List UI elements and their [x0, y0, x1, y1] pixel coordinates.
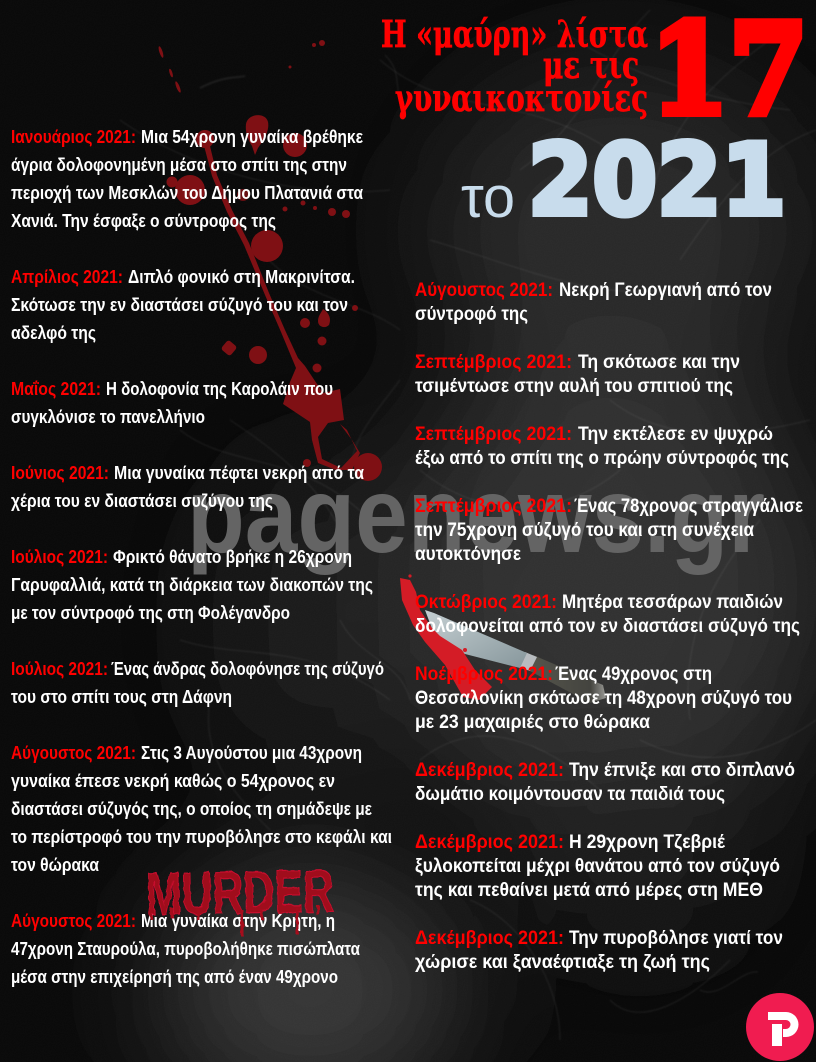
entry: Αύγουστος 2021, περίστροφο: γυναίκα έπεσε νεκρή καθώς ο 54χρονος εν: [11, 771, 335, 791]
entry: Δεκέμβριος 2021, Τζεβριέ: ξυλοκοπείται μέχρι θανάτου από τον σύζυγό: [415, 855, 780, 877]
entry: Σεπτέμβριος 2021, εκτέλεση: [415, 423, 789, 469]
entry: Σεπτέμβριος 2021, 78χρονος: Σεπτέμβριος 2021:: [415, 495, 572, 517]
icon: MURDER lettering: MURDER: [145, 857, 335, 928]
entry: Απρίλιος 2021: Σκότωσε την εν διαστάσει σύζυγό του και τον: [11, 295, 348, 316]
entry: Αύγουστος 2021, Γεωργιανή: σύντροφό της: [415, 303, 528, 325]
entry: Σεπτέμβριος 2021, αυλή: Σεπτέμβριος 2021:: [415, 351, 572, 373]
title: Η «μαύρη» λίστα με τις γυναικοκτονίες: με τις: [543, 43, 639, 87]
entry: Δεκέμβριος 2021, έπνιξε: Την έπνιξε και στο διπλανό: [569, 759, 795, 781]
entry: Αύγουστος 2021, Κρήτη: 47χρονη Σταυρούλα, πυροβολήθηκε πισώπλατα: [11, 939, 360, 959]
entry: Σεπτέμβριος 2021, αυλή: Τη σκότωσε και την: [578, 351, 740, 373]
entry: Μαΐος 2021: Η δολοφονία της Καρολάιν που: [106, 379, 333, 399]
entry: Αύγουστος 2021, περίστροφο: Αύγουστος 2021:: [11, 743, 136, 763]
entry: Ιούνιος 2021: Ιούνιος 2021:: [11, 463, 109, 483]
entry: Δεκέμβριος 2021, πυροβόλησε: χώρισε και ξαναέφτιαξε τη ζωή της: [415, 951, 710, 973]
entry: Σεπτέμβριος 2021, 78χρονος: την 75χρονη σύζυγό του και στη συνέχεια: [415, 519, 754, 541]
icon: MURDER lettering: [145, 857, 335, 936]
entry: Αύγουστος 2021, περίστροφο: τον θώρακα: [11, 855, 99, 875]
panel: left column: [11, 127, 392, 987]
logo: Pagenews P: [746, 993, 814, 1061]
entry: Οκτώβριος 2021: [415, 591, 800, 637]
title: Η «μαύρη» λίστα με τις γυναικοκτονίες: γυναικοκτονίες: [395, 76, 648, 120]
entry: Σεπτέμβριος 2021, εκτέλεση: Σεπτέμβριος 2021:: [415, 423, 572, 445]
entry: Ιανουάριος 2021: περιοχή των Μεσκλών του Δήμου Πλατανιά στα: [11, 183, 363, 203]
entry: Ιούλιος 2021, Δάφνη: Ένας άνδρας δολοφόνησε της σύζυγό: [111, 659, 384, 680]
entry: Οκτώβριος 2021: Μητέρα τεσσάρων παιδιών: [562, 591, 783, 613]
entry: Σεπτέμβριος 2021, εκτέλεση: Την εκτέλεσε εν ψυχρώ: [578, 423, 773, 445]
entry: Νοέμβριος 2021: Ένας 49χρονος στη: [555, 663, 712, 685]
entry: Αύγουστος 2021, περίστροφο: το περίστροφό του την πυροβόλησε στο κεφάλι και: [11, 827, 392, 847]
entry: Ιούλιος 2021, Δάφνη: [11, 659, 384, 707]
entry: Ιανουάριος 2021: Χανιά. Την έσφαξε ο σύντροφος της: [11, 211, 276, 232]
entry: Απρίλιος 2021: αδελφό της: [11, 323, 96, 343]
icon: bloody knife: [400, 574, 606, 703]
entry: Σεπτέμβριος 2021, αυλή: [415, 351, 740, 397]
entry: Αύγουστος 2021, Γεωργιανή: Νεκρή Γεωργιανή από τον: [559, 279, 772, 301]
entry: Αύγουστος 2021, Κρήτη: Αύγουστος 2021:: [11, 911, 136, 931]
entry: Δεκέμβριος 2021, πυροβόλησε: Δεκέμβριος 2021:: [415, 927, 564, 949]
entry: Αύγουστος 2021, περίστροφο: Στις 3 Αυγούστου μια 43χρονη: [141, 743, 362, 763]
entry: Αύγουστος 2021, Κρήτη: μέσα στην επιχείρησή της από έναν 49χρονο: [11, 967, 338, 987]
entry: Αύγουστος 2021, Γεωργιανή: Αύγουστος 2021:: [415, 279, 553, 301]
entry: Δεκέμβριος 2021, Τζεβριέ: [415, 831, 780, 901]
entry: Δεκέμβριος 2021, έπνιξε: δωμάτιο κοιμόντουσαν τα παιδιά τους: [415, 783, 725, 805]
year heading: το 2021: 2021: [528, 124, 786, 238]
entry: Ιούλιος 2021, Φολέγανδρος: Γαρυφαλλιά, κατά τη διάρκεια των διακοπών της: [11, 575, 373, 595]
title: Η «μαύρη» λίστα με τις γυναικοκτονίες: [381, 12, 648, 120]
entry: Απρίλιος 2021: [11, 267, 355, 343]
entry: Αύγουστος 2021, Γεωργιανή: [415, 279, 772, 325]
entry: Σεπτέμβριος 2021, 78χρονος: αυτοκτόνησε: [415, 543, 521, 565]
entry: Αύγουστος 2021, περίστροφο: διαστάσει σύζυγός της, ο οποίος τη σημάδεψε με: [11, 799, 372, 820]
entry: Δεκέμβριος 2021, πυροβόλησε: Την πυροβόλησε γιατί τον: [569, 927, 783, 949]
entry: Ιούνιος 2021: [11, 463, 364, 512]
entry: Απρίλιος 2021: Απρίλιος 2021:: [11, 267, 123, 287]
panel: right column: [415, 279, 803, 973]
entry: Αύγουστος 2021, Κρήτη: Μια γυναίκα στην Κρήτη, η: [141, 911, 335, 931]
entry: Δεκέμβριος 2021, έπνιξε: Δεκέμβριος 2021:: [415, 759, 564, 781]
entry: Ιούλιος 2021, Φολέγανδρος: Ιούλιος 2021:: [11, 547, 108, 567]
entry: Ιούλιος 2021, Φολέγανδρος: [11, 547, 373, 623]
entry: Σεπτέμβριος 2021, αυλή: τσιμέντωσε στην αυλή του σπιτιού της: [415, 375, 733, 397]
entry: Νοέμβριος 2021: [415, 663, 792, 733]
entry: Ιανουάριος 2021: [11, 127, 363, 232]
entry: Ιούνιος 2021: χέρια του εν διαστάσει συζύγου της: [11, 491, 273, 512]
entry: Μαΐος 2021: Μαΐος 2021:: [11, 379, 101, 399]
entry: Ιούλιος 2021, Δάφνη: του στο σπίτι τους στη Δάφνη: [11, 687, 232, 707]
entry: Σεπτέμβριος 2021, 78χρονος: [415, 495, 803, 565]
entry: Νοέμβριος 2021: με 23 μαχαιριές στο θώρακα: [415, 711, 650, 733]
entry: Αύγουστος 2021, Κρήτη: [11, 911, 360, 987]
entry: Ιούνιος 2021: Μια γυναίκα πέφτει νεκρή από τα: [114, 463, 364, 483]
blood splatter: [158, 40, 382, 481]
entry: Οκτώβριος 2021: Οκτώβριος 2021:: [415, 591, 557, 613]
entry: Νοέμβριος 2021: Νοέμβριος 2021:: [415, 663, 553, 685]
entry: Δεκέμβριος 2021, έπνιξε: [415, 759, 795, 805]
entry: Ιούλιος 2021, Φολέγανδρος: Φρικτό θάνατο βρήκε η 26χρονη: [113, 547, 352, 567]
entry: Δεκέμβριος 2021, πυροβόλησε: [415, 927, 783, 973]
entry: Μαΐος 2021: συγκλόνισε το πανελλήνιο: [11, 407, 205, 427]
entry: Δεκέμβριος 2021, Τζεβριέ: Η 29χρονη Τζεβριέ: [569, 831, 725, 853]
entry: Αύγουστος 2021, περίστροφο: [11, 743, 392, 875]
entry: Ιούλιος 2021, Δάφνη: Ιούλιος 2021:: [11, 659, 108, 679]
entry: Ιούλιος 2021, Φολέγανδρος: με τον σύντροφό της στη Φολέγανδρο: [11, 603, 290, 623]
title: Η «μαύρη» λίστα με τις γυναικοκτονίες: Η «μαύρη» λίστα: [381, 12, 648, 56]
entry: Δεκέμβριος 2021, Τζεβριέ: της και πεθαίνει μετά από μέρες στη ΜΕΘ: [415, 879, 763, 901]
entry: Ιανουάριος 2021: Μια 54χρονη γυναίκα βρέθηκε: [141, 127, 363, 147]
entry: Δεκέμβριος 2021, Τζεβριέ: Δεκέμβριος 2021:: [415, 831, 564, 853]
entry: Μαΐος 2021: [11, 379, 333, 427]
entry: Απρίλιος 2021: Διπλό φονικό στη Μακρινίτσα.: [128, 267, 355, 287]
year heading: το 2021: το: [461, 165, 515, 230]
entry: Ιανουάριος 2021: άγρια δολοφονημένη μέσα στο σπίτι της στην: [11, 155, 347, 175]
entry: Ιανουάριος 2021: Ιανουάριος 2021:: [11, 127, 136, 147]
